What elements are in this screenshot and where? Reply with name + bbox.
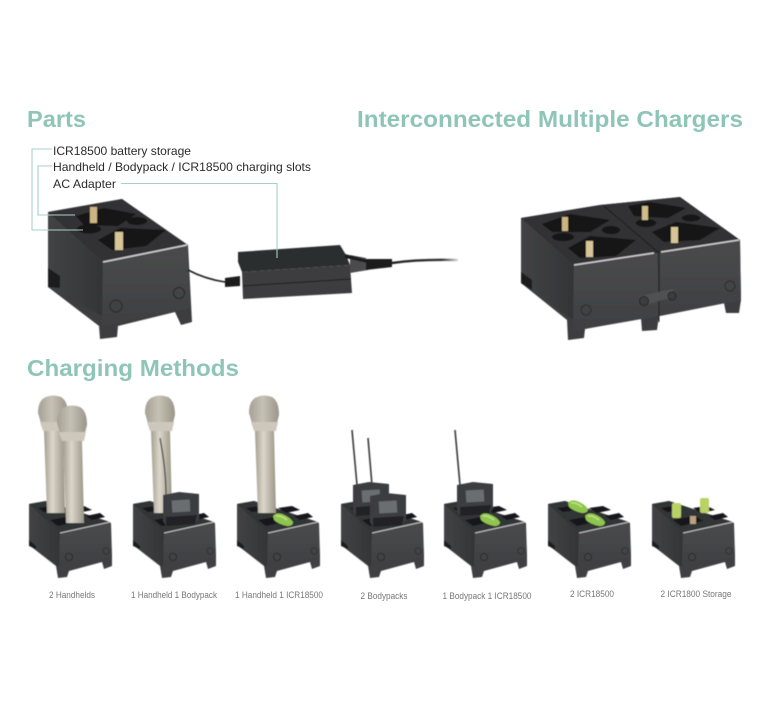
charging method: 2 ICR1800 storage (652, 498, 735, 599)
interconnected chargers (521, 197, 741, 340)
charging method: 1 handheld 1 ICR18500: 1 Handheld 1 ICR18500 (235, 590, 323, 600)
part labels: Handheld / Bodypack / ICR18500 charging slots (53, 160, 311, 174)
part labels: ICR18500 battery storage (53, 144, 191, 158)
charging method: 2 handhelds (29, 396, 112, 600)
charging method: 2 ICR18500: 2 ICR18500 (570, 589, 614, 599)
leader lines: parts callouts (32, 149, 277, 258)
title: Charging Methods: Charging Methods (27, 355, 239, 381)
parts charger (48, 199, 192, 339)
part labels (53, 144, 311, 191)
charging method: 1 bodypack 1 ICR18500 (442, 430, 532, 601)
charging method: 2 ICR1800 storage: 2 ICR1800 Storage (660, 589, 732, 599)
charging method: 1 bodypack 1 ICR18500: 1 Bodypack 1 ICR18500 (442, 591, 532, 601)
charging method: 1 handheld 1 bodypack (131, 396, 217, 600)
AC adapter with cables (188, 245, 458, 299)
title: Parts: Parts (27, 106, 86, 132)
charging method: 2 bodypacks: 2 Bodypacks (360, 591, 408, 601)
part labels: AC Adapter (53, 177, 116, 191)
charging method: 1 handheld 1 bodypack: 1 Handheld 1 Bodypack (131, 590, 217, 600)
title: Interconnected Multiple Chargers: Interconnected Multiple Chargers (357, 106, 743, 132)
charging method: 2 ICR18500 (548, 500, 631, 599)
charging method: 2 bodypacks (341, 430, 424, 601)
charging method: 1 handheld 1 ICR18500 (235, 396, 323, 600)
charging method: 2 handhelds: 2 Handhelds (49, 590, 95, 600)
